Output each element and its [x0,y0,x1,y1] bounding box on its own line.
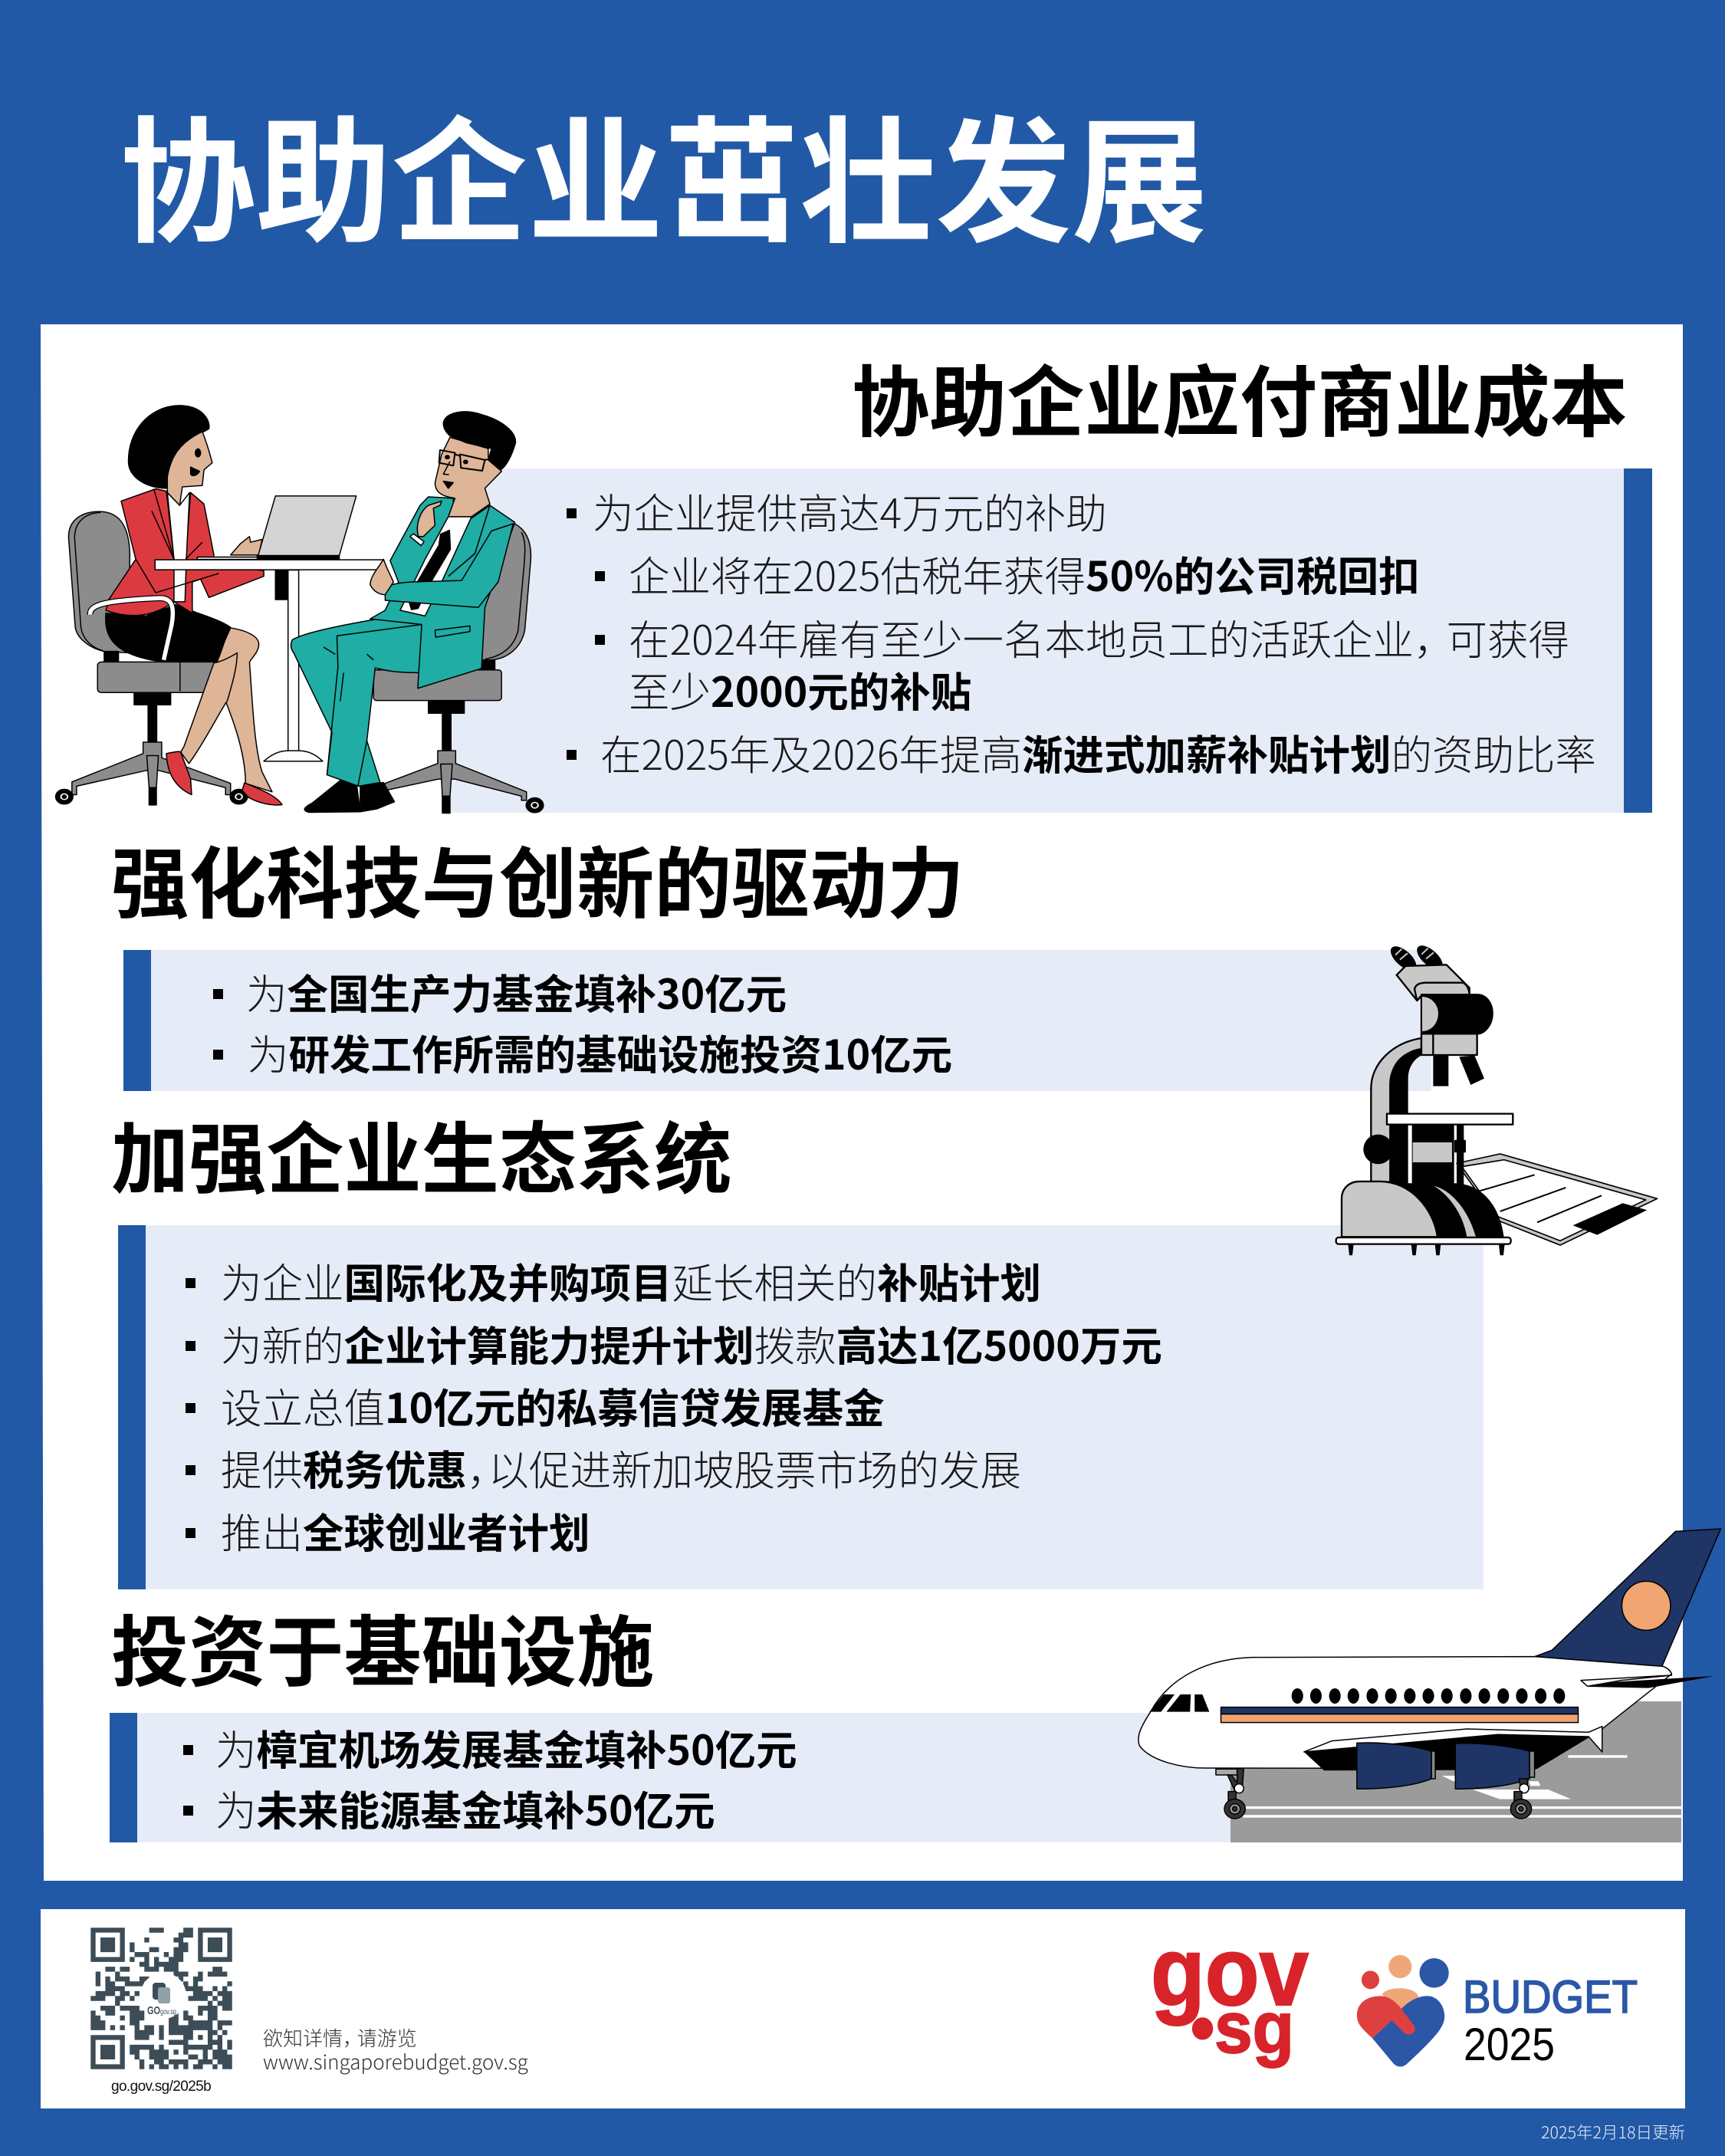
illustration: aeroplane [1138,1529,1720,1819]
logo: Budget 2025: 2025 [1464,2019,1555,2070]
panel: ecosystem list [118,1225,1484,1589]
bullet: R&D infrastructure: 为研发工作所需的基础设施投资10亿元 [248,1023,952,1082]
laptop [258,496,356,556]
heading: infrastructure: 投资于基础设施 [111,1591,654,1703]
bullet: grant: 为企业提供高达4万元的补助 [593,481,1107,541]
fuselage [1138,1657,1671,1769]
column [1412,1125,1454,1185]
eyepieces [1387,942,1421,974]
bullet: compute: 为新的企业计算能力提升计划拨款高达1亿5000万元 [221,1314,1162,1373]
arm [1371,1038,1421,1182]
bullet: founders: 推出全球创业者计划 [221,1501,590,1560]
QR code [90,1930,232,2067]
wing [1304,1734,1589,1770]
footer panel [41,1909,1685,2108]
man's head [435,437,501,517]
logo: gov.sg: •sg [1191,1987,1294,2069]
section: infrastructure [110,1591,1230,1842]
engines [1431,1751,1435,1779]
trousers [291,616,425,786]
title: 协助企业茁壮发展 [120,74,1208,271]
footer text: 欲知详情， 请游览 [263,2023,417,2052]
bullet: energy fund: 为未来能源基金填补50亿元 [215,1779,715,1838]
bullet: active firms: 在2024年雇有至少一名本地员工的活跃企业，可获得 [629,608,1569,667]
cheatline [1221,1707,1579,1714]
logo: gov.sg: gov [1151,1917,1309,2026]
paper [1457,1154,1658,1245]
update date: 2025年2月18日更新 [1541,2120,1685,2144]
bullet continuation: 至少2000元的补贴 [629,660,971,719]
logo: Budget 2025 [1357,1955,1638,2070]
bullet: private credit: 设立总值10亿元的私募信贷发展基金 [221,1376,885,1435]
table top [155,560,383,570]
heading: business costs: 协助企业应付商业成本 [852,341,1628,453]
cockpit [1149,1694,1209,1712]
section: technology and innovation [111,823,1431,1091]
armrest [90,598,172,660]
QR caption: go.gov.sg/2025b [111,2079,211,2095]
panel: infrastructure list [110,1713,1230,1842]
bullet: productivity fund: 为全国生产力基金填补30亿元 [246,962,787,1021]
windows [1292,1688,1565,1704]
footer text: www.singaporebudget.gov.sg [263,2047,528,2075]
footer text [263,2023,528,2075]
QR code: GOgov.sg [147,2004,176,2017]
logo: Budget 2025: BUDGET [1463,1971,1638,2023]
landing gear [1216,1769,1237,1775]
tail [1535,1529,1720,1666]
section: enterprise ecosystem [111,1098,1484,1589]
objectives [1433,1056,1484,1086]
bullet: internationalisation: 为企业国际化及并购项目延长相关的补贴计划 [221,1251,1041,1310]
man's hands [417,501,442,537]
logo: gov.sg [1151,1917,1309,2069]
illustration: two people at a table [56,406,544,813]
jacket [370,497,515,689]
bullet: wage credit: 在2025年及2026年提高渐进式加薪补贴计划的资助比率 [600,723,1596,782]
panel: business costs list [450,468,1652,813]
section: business costs [451,341,1652,813]
bullet: tax incentives: 提供税务优惠，以促进新加坡股票市场的发展 [221,1438,1021,1497]
heading: technology: 强化科技与创新的驱动力 [111,823,964,935]
illustration: microscope [1336,942,1658,1255]
panel: technology list [123,950,1431,1091]
bullet: Changi: 为樟宜机场发展基金填补50亿元 [215,1718,797,1777]
bullet: tax rebate: 企业将在2025估税年获得50%的公司税回扣 [629,544,1420,603]
heading: ecosystem: 加强企业生态系统 [111,1098,731,1210]
base [1390,1183,1504,1237]
head [1397,965,1470,1001]
stabiliser [1585,1676,1714,1688]
man's chair [478,524,531,660]
illustration: runway [1230,1701,1681,1842]
main white panel [41,324,1683,1881]
back leg [215,628,272,792]
